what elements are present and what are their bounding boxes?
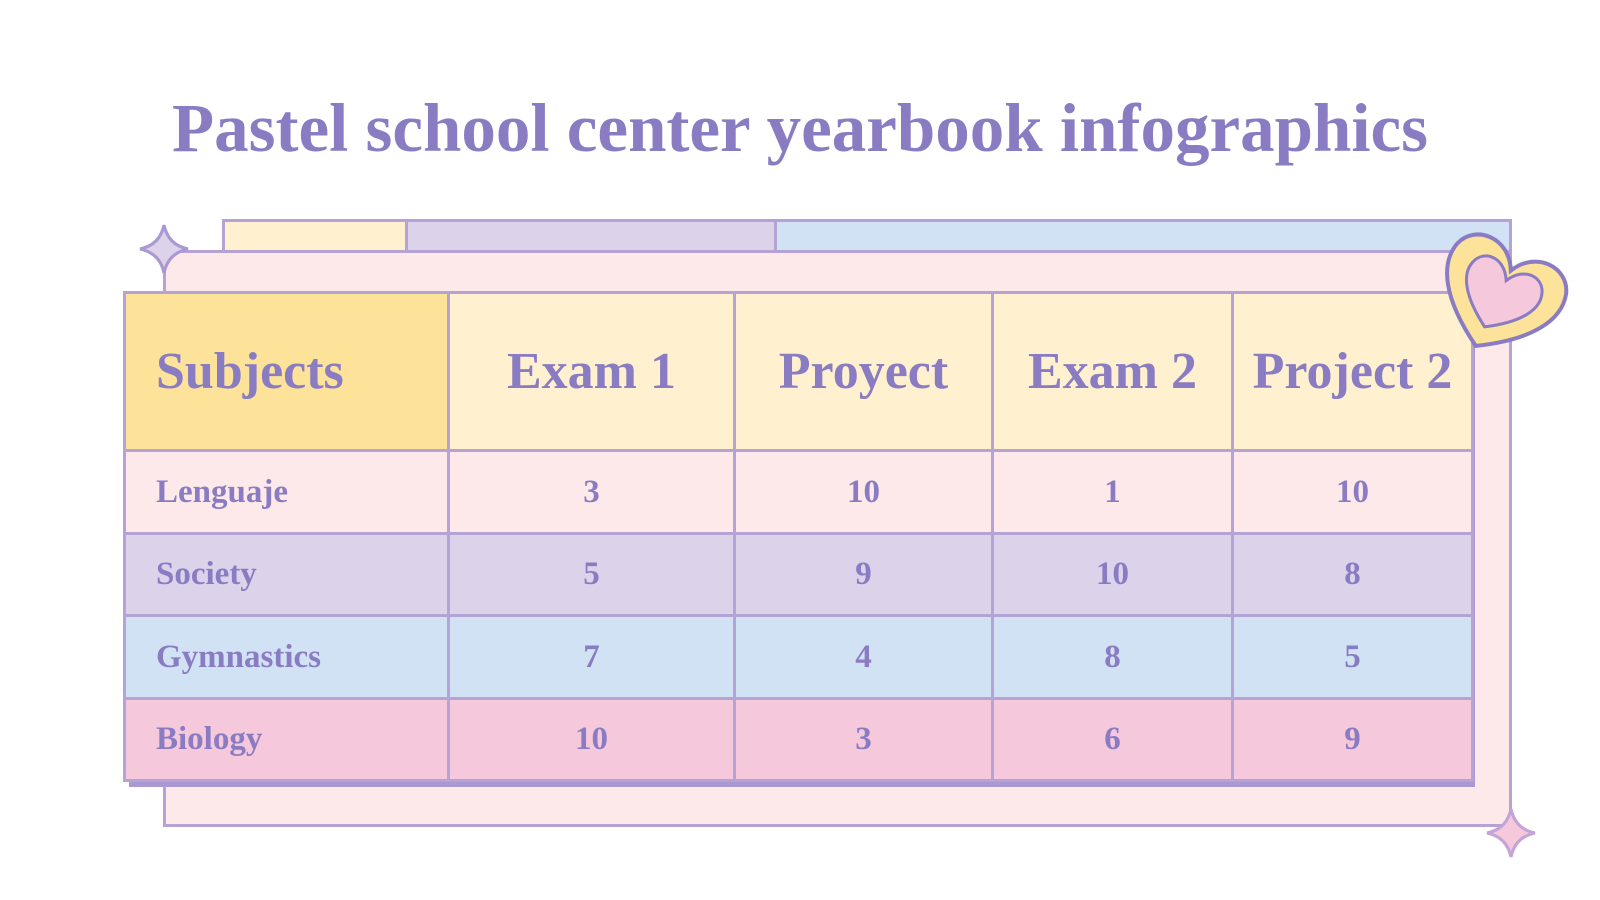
title: Pastel school center yearbook infographics <box>172 90 1428 166</box>
table: Subjects <box>156 343 344 400</box>
icon: heart <box>1445 232 1568 348</box>
table: 8 <box>1104 638 1121 674</box>
table: 8 <box>1344 556 1361 592</box>
table: Proyect <box>779 343 948 400</box>
table: Project 2 <box>1253 343 1452 400</box>
table: 4 <box>855 638 872 674</box>
table <box>123 291 1474 782</box>
table: 10 <box>1336 474 1369 510</box>
table: Gymnastics <box>156 638 321 674</box>
icon: sparkle bottom-right <box>1486 808 1536 858</box>
table: Biology <box>156 721 262 757</box>
table: 5 <box>1344 638 1361 674</box>
table: 9 <box>855 556 872 592</box>
table: 3 <box>855 721 872 757</box>
table: 7 <box>583 638 600 674</box>
table: 3 <box>583 474 600 510</box>
icon: sparkle top-left <box>140 224 188 274</box>
table: 10 <box>1096 556 1129 592</box>
top tabs <box>222 219 1512 250</box>
table: Society <box>156 556 257 592</box>
table: Lenguaje <box>156 474 288 510</box>
table: 6 <box>1104 721 1121 757</box>
table: 9 <box>1344 721 1361 757</box>
table: 10 <box>847 474 880 510</box>
back panel <box>163 250 1512 827</box>
table shadow <box>129 297 1475 787</box>
table: 5 <box>583 556 600 592</box>
table: Exam 1 <box>507 343 676 400</box>
table: 1 <box>1104 474 1121 510</box>
table: 10 <box>575 721 608 757</box>
table: Exam 2 <box>1028 343 1197 400</box>
